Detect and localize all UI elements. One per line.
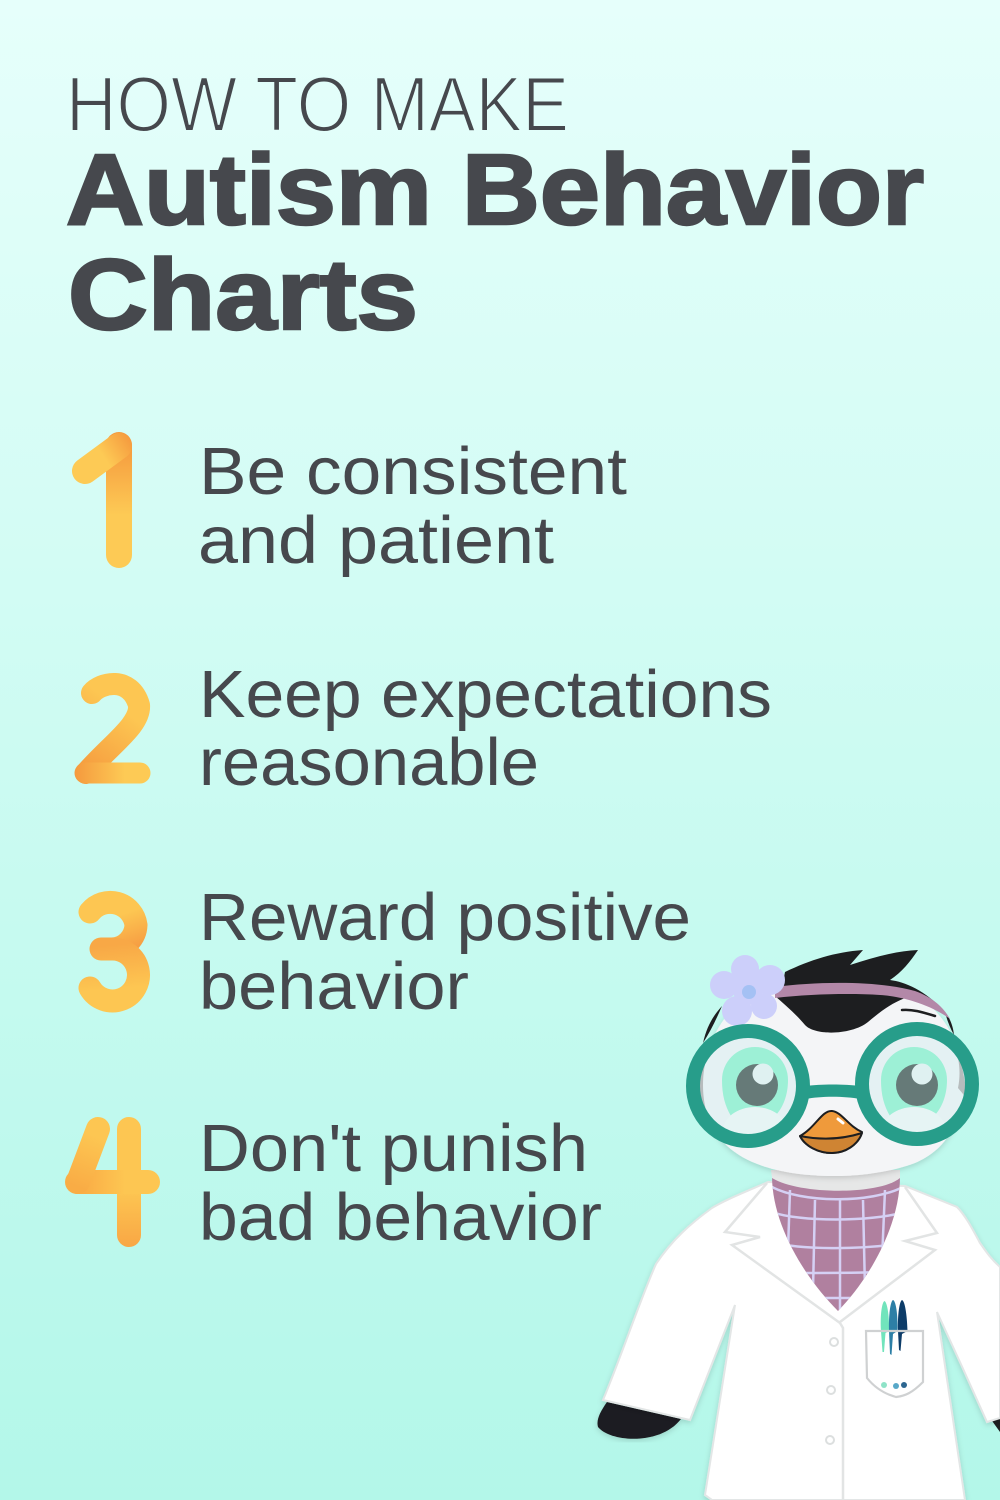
coat lapels xyxy=(725,1183,937,1500)
flower xyxy=(710,955,785,1026)
title: autism behavior: Autism Behavior xyxy=(66,134,924,246)
pocket logo xyxy=(881,1382,907,1389)
penguin mascot xyxy=(597,950,1000,1500)
scarf grid xyxy=(772,1186,905,1310)
step 1 text: Be consistent xyxy=(199,434,627,509)
left eye xyxy=(700,1047,788,1116)
step 4 number xyxy=(77,1129,148,1235)
step 3 number xyxy=(90,902,138,1001)
step 4 text: bad behavior xyxy=(199,1180,602,1255)
coat pocket xyxy=(866,1331,923,1397)
right eye xyxy=(881,1047,965,1116)
forehead patch xyxy=(775,993,905,1033)
step 3 text: Reward positive xyxy=(199,880,691,955)
title: how to make: HOW TO MAKE xyxy=(66,60,569,148)
step 3 text xyxy=(199,880,691,1024)
step 2 text: Keep expectations xyxy=(199,657,772,732)
step 1 text xyxy=(198,434,627,578)
step 1 number xyxy=(85,445,119,555)
beak xyxy=(800,1111,862,1153)
step 4 text xyxy=(199,1111,602,1255)
step 2 text: reasonable xyxy=(199,725,539,800)
head xyxy=(703,974,962,1176)
head side outline xyxy=(703,1006,954,1043)
glasses xyxy=(693,1029,972,1155)
step 2 text xyxy=(199,657,772,800)
title: charts: Charts xyxy=(68,239,418,351)
left flipper xyxy=(597,1402,681,1439)
neck xyxy=(771,1170,900,1191)
scarf xyxy=(772,1176,900,1311)
hair xyxy=(780,950,945,1012)
step 1 text: and patient xyxy=(198,503,554,578)
lab coat xyxy=(603,1176,1000,1500)
title xyxy=(66,60,924,351)
step 4 text: Don't punish xyxy=(199,1111,588,1186)
step 3 text: behavior xyxy=(199,949,469,1024)
right flipper xyxy=(990,1412,1000,1432)
headband xyxy=(775,983,950,1019)
glasses bridge xyxy=(806,1084,860,1099)
coat buttons xyxy=(826,1338,838,1444)
eyebrow xyxy=(902,1010,935,1016)
step 2 number xyxy=(85,684,140,773)
pens xyxy=(881,1300,908,1355)
